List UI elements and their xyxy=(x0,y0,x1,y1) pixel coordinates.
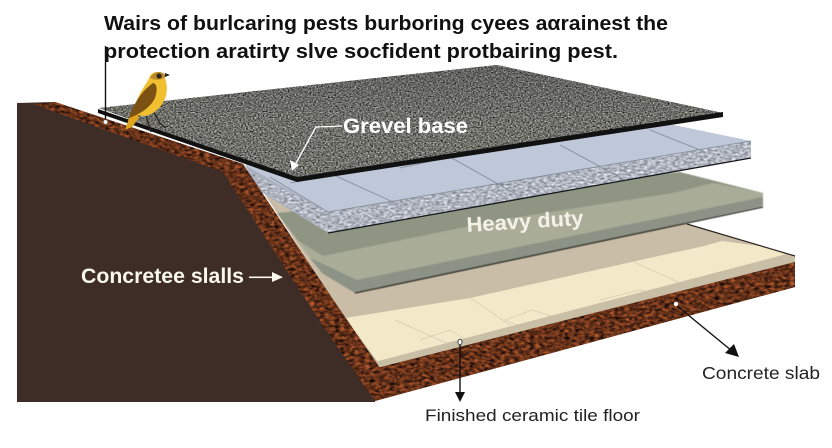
gravel base layer xyxy=(98,65,723,182)
label: gravel base xyxy=(290,115,468,171)
label: gravel base: Grevel base xyxy=(343,115,468,138)
label: concrete walls with arrow: Concretee slalls xyxy=(81,265,244,288)
label: finished ceramic tile floor with arrow: Finished ceramic tile floor xyxy=(425,407,641,425)
title xyxy=(104,12,668,63)
bird xyxy=(125,72,170,132)
stone paver layer xyxy=(245,118,751,233)
ceramic tile layer xyxy=(262,190,795,369)
label: finished ceramic tile floor with arrow xyxy=(425,339,641,425)
label: heavy duty: Heavy duty xyxy=(466,207,584,237)
heavy duty layer xyxy=(277,172,763,293)
leader line from title to wall xyxy=(103,46,108,124)
concrete slab layer xyxy=(330,262,795,401)
title: Wairs of burlcaring pests burboring cyees aαrainest the xyxy=(104,12,668,35)
title: protection aratirty slve socfident protbairing pest. xyxy=(104,40,618,63)
label: concrete slab with arrow: Concrete slab xyxy=(702,363,820,383)
retaining earth wall xyxy=(17,102,380,402)
label: concrete slab with arrow xyxy=(674,302,820,383)
